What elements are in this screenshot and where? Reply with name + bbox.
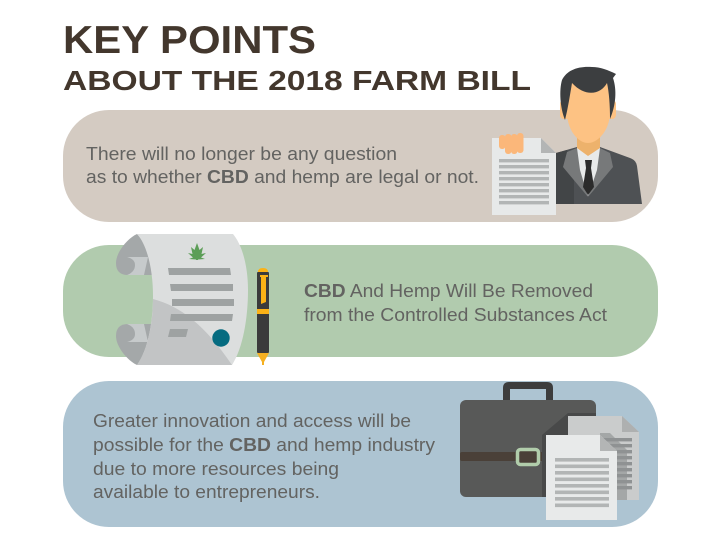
panel: innovation and access: due to more resources being	[93, 459, 339, 479]
panel: innovation and access	[63, 381, 658, 527]
panel: controlled substances: CBD And Hemp Will Be Removed	[304, 281, 593, 301]
panel: innovation and access: Greater innovation and access will be	[93, 411, 411, 431]
icon: stacked documents	[546, 416, 639, 520]
panel: controlled substances	[63, 245, 658, 357]
panel: legal question: There will no longer be any question	[86, 144, 397, 164]
icon: pen	[257, 268, 269, 365]
icon: document	[492, 133, 556, 215]
panel: legal question: as to whether CBD and hemp are legal or not.	[86, 167, 479, 187]
panel: innovation and access: possible for the CBD and hemp industry	[93, 435, 435, 455]
icon: scroll	[116, 234, 248, 365]
title: KEY POINTS	[63, 19, 316, 62]
panel: innovation and access: available to entrepreneurs.	[93, 482, 320, 502]
icon: man holding document	[556, 67, 642, 204]
panel: controlled substances: from the Controlled Substances Act	[304, 305, 607, 325]
title	[63, 19, 531, 96]
icon: briefcase	[460, 382, 596, 497]
title: ABOUT THE 2018 FARM BILL	[63, 65, 531, 96]
panel: legal question	[63, 110, 658, 222]
